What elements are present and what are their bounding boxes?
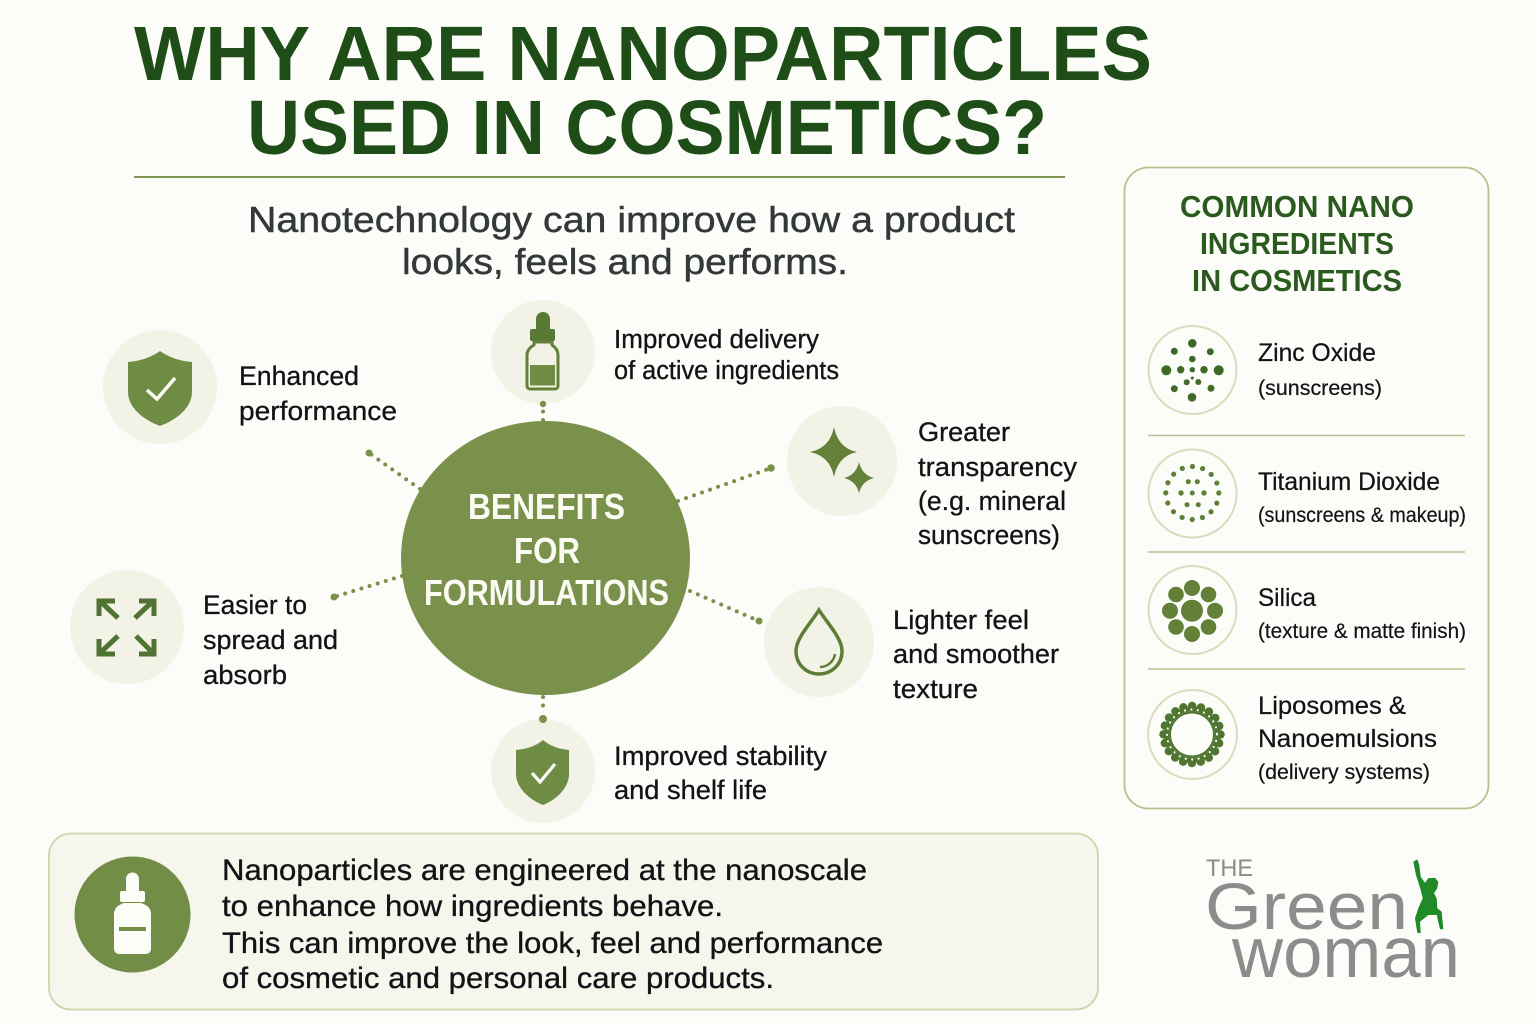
ingredient: zinc oxide — [1148, 326, 1382, 414]
benefit: improved delivery: Improved delivery — [614, 326, 819, 354]
callout text — [222, 854, 883, 995]
logo: the green woman: THE — [1206, 855, 1253, 882]
benefit: enhanced performance — [103, 330, 397, 444]
benefit: greater transparency: transparency — [918, 452, 1077, 482]
ingredient: silica: (texture & matte finish) — [1258, 620, 1466, 643]
callout text: This can improve the look, feel and performance — [222, 927, 883, 960]
connector: stability — [539, 697, 547, 723]
title: WHY ARE NANOPARTICLES — [134, 11, 1152, 97]
ingredient: titanium dioxide: (sunscreens & makeup) — [1258, 504, 1466, 527]
central circle: benefits for formulations: BENEFITS — [468, 486, 625, 527]
central circle: benefits for formulations: FORMULATIONS — [424, 572, 669, 613]
panel heading — [1180, 189, 1414, 298]
benefit: greater transparency: (e.g. mineral — [918, 486, 1066, 516]
benefit: lighter feel: and smoother — [893, 639, 1059, 669]
benefit: greater transparency: Greater — [918, 417, 1010, 447]
title: USED IN COSMETICS? — [247, 85, 1047, 171]
panel heading: INGREDIENTS — [1200, 226, 1394, 261]
icon: green figure — [1413, 859, 1443, 933]
ingredient: titanium dioxide: Titanium Dioxide — [1258, 468, 1440, 496]
benefit: lighter feel: texture — [893, 674, 978, 704]
connector: enhanced performance — [366, 450, 420, 489]
benefit: easier to spread — [70, 570, 338, 690]
benefit: greater transparency: sunscreens) — [918, 520, 1060, 550]
ingredient: silica: Silica — [1258, 584, 1316, 612]
ingredient: silica — [1148, 566, 1466, 654]
connector: delivery — [540, 401, 546, 420]
benefit: easier to spread: absorb — [203, 660, 287, 690]
logo: the green woman — [1205, 855, 1460, 993]
benefit: greater transparency — [787, 406, 1077, 550]
benefit: lighter feel — [764, 587, 1059, 704]
connector: transparency — [678, 464, 775, 501]
callout text: Nanoparticles are engineered at the nanoscale — [222, 854, 867, 887]
ingredient: liposomes and nanoemulsions: Nanoemulsions — [1258, 725, 1437, 753]
callout text: of cosmetic and personal care products. — [222, 962, 774, 995]
title — [134, 11, 1152, 171]
callout text: to enhance how ingredients behave. — [222, 890, 723, 923]
icon: white bottle in green circle — [74, 856, 190, 972]
benefit: improved stability: Improved stability — [614, 741, 827, 771]
benefit: improved delivery — [491, 300, 839, 404]
benefit: lighter feel: Lighter feel — [893, 605, 1029, 635]
ingredient: liposomes and nanoemulsions: (delivery systems) — [1258, 761, 1430, 784]
panel heading: COMMON NANO — [1180, 189, 1414, 224]
benefit: easier to spread: spread and — [203, 625, 338, 655]
panel heading: IN COSMETICS — [1192, 263, 1402, 298]
connector: lighter feel — [690, 591, 762, 624]
subtitle — [248, 199, 1015, 282]
benefit: enhanced performance: Enhanced — [239, 361, 359, 391]
benefit: enhanced performance: performance — [239, 396, 397, 426]
logo: the green woman: woman — [1231, 914, 1460, 993]
panel: common nano ingredients — [1124, 168, 1488, 808]
ingredient: liposomes and nanoemulsions: Liposomes & — [1258, 692, 1406, 720]
callout: summary panel — [49, 834, 1098, 1010]
subtitle: looks, feels and performs. — [402, 241, 848, 282]
ingredient: liposomes and nanoemulsions — [1148, 690, 1437, 784]
benefit: improved stability: and shelf life — [614, 775, 767, 805]
benefit: easier to spread: Easier to — [203, 590, 307, 620]
ingredient: zinc oxide: Zinc Oxide — [1258, 339, 1376, 367]
ingredient: zinc oxide: (sunscreens) — [1258, 377, 1382, 400]
ingredient: titanium dioxide — [1148, 450, 1466, 538]
central circle: benefits for formulations — [401, 421, 690, 695]
central circle: benefits for formulations: FOR — [514, 530, 580, 571]
connector: spreadability — [330, 576, 402, 600]
benefit: improved stability — [491, 719, 827, 823]
logo: the green woman: Green — [1205, 869, 1408, 943]
benefit: improved delivery: of active ingredients — [614, 357, 839, 385]
subtitle: Nanotechnology can improve how a product — [248, 199, 1015, 240]
